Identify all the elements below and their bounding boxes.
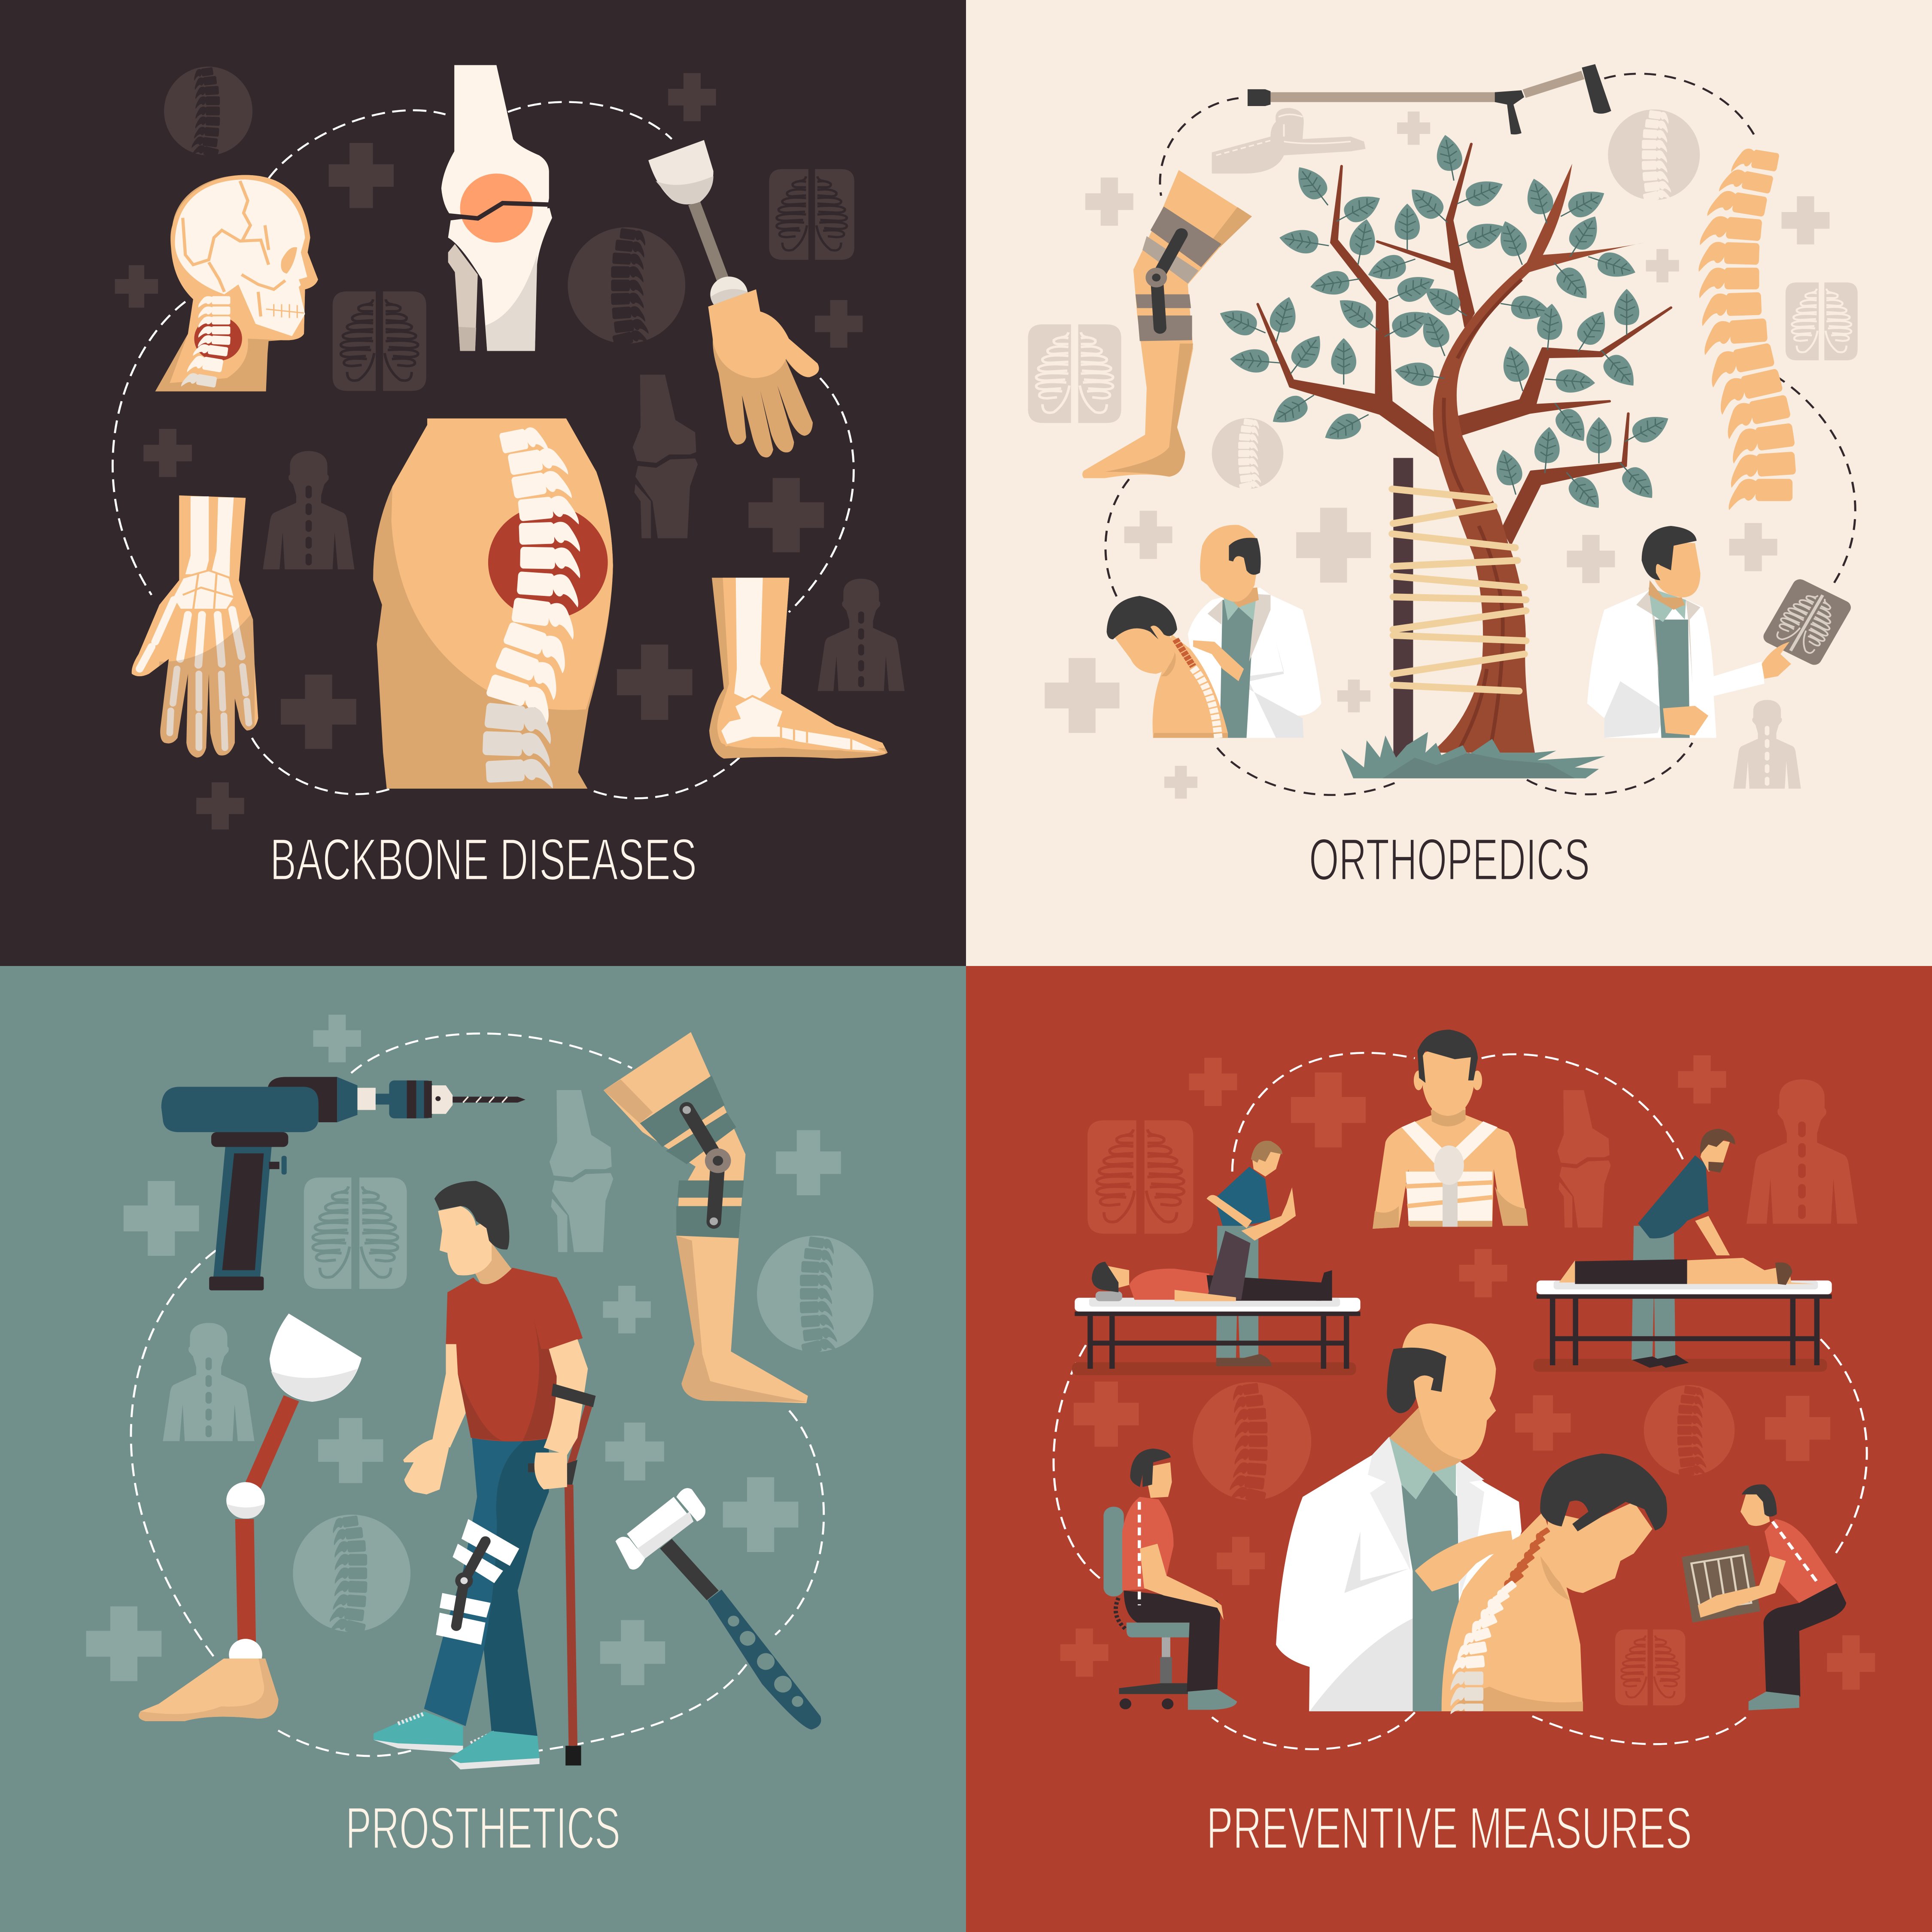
illustration group: orthopedics [1028,64,1858,799]
illustration group: backbone diseases [112,65,905,829]
background icons: crosses, ribs, discs, busts [115,67,905,829]
title: orthopedics: ORTHOPEDICS [1309,827,1590,893]
figure: doctor with x-ray [1587,526,1853,738]
title: preventive measures: PREVENTIVE MEASURES [1206,1795,1692,1861]
figure: therapist with patient on table [1072,1141,1361,1375]
background icons: crosses, ribs, discs, busts [1028,108,1858,799]
icon: skull and neck [155,175,318,392]
background icons: crosses, ribs, discs, busts [86,1015,874,1685]
icon: knee joint fracture [441,65,552,351]
title: prosthetics: PROSTHETICS [346,1795,620,1861]
icon: leg with knee brace [1082,170,1252,478]
illustration group: preventive measures [1054,1030,1875,1749]
figure: doctor examining patient spine [1276,1323,1667,1714]
dashed ring [1106,74,1855,795]
figure: man with back brace [1373,1030,1528,1229]
dashed ring [112,102,854,798]
dashed ring [131,1033,824,1756]
icon: torso with spine [373,419,613,792]
figure: man holding x-ray [1682,1484,1846,1710]
icon: prosthetic arm and hand [648,140,819,457]
icon: hand skeleton [132,495,258,768]
tree with splint [1215,133,1674,778]
panel: preventive measures [966,966,1932,1932]
background icons: crosses, ribs, discs, busts [1060,1055,1875,1705]
figure: man with crutch [374,1181,595,1769]
icon: spine [1698,146,1797,510]
icon: prosthetic leg [139,1313,361,1721]
icon: reflex hammer [616,1488,821,1729]
figure: therapist massaging patient [1533,1129,1832,1372]
panel: prosthetics [0,966,966,1932]
title: backbone diseases: BACKBONE DISEASES [270,827,697,893]
illustration group: prosthetics [86,1015,874,1769]
figure: doctor examining patient [1107,525,1321,738]
figure: man seated on office chair [1103,1449,1237,1710]
panel: orthopedics [966,0,1932,966]
icon: leg with knee brace [604,1032,808,1403]
dashed ring [1054,1053,1867,1749]
panel: backbone diseases [112,65,905,880]
icon: surgical drill [161,1077,526,1291]
icon: foot skeleton [709,578,888,759]
icon: crutch [1248,64,1611,134]
